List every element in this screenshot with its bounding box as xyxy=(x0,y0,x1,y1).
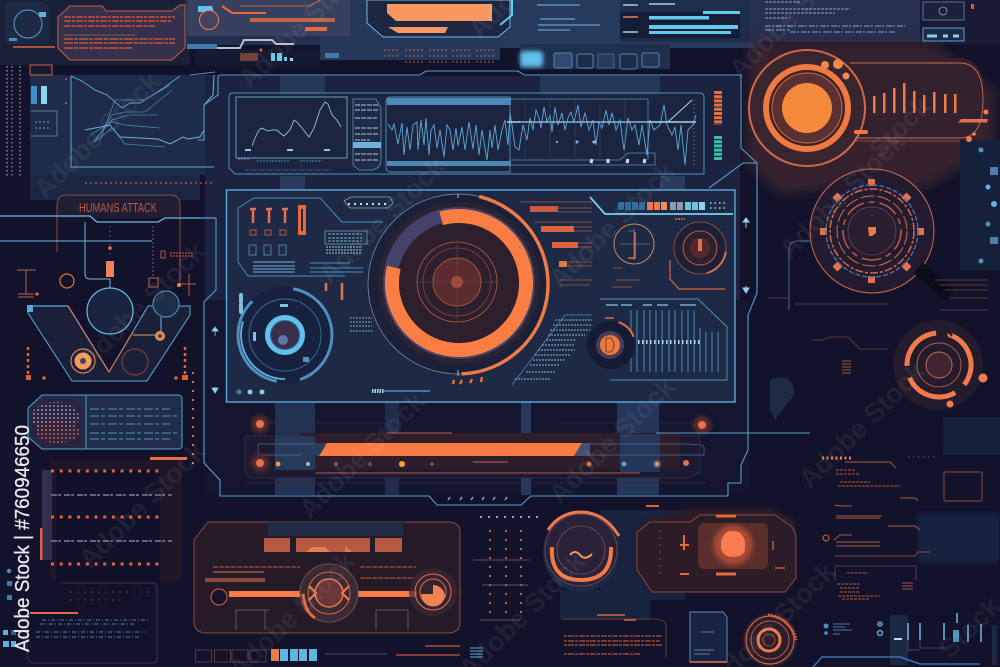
top mini data strip xyxy=(325,50,494,62)
top right text lines xyxy=(765,2,905,32)
gauge: small thin xyxy=(612,224,654,287)
gauge: top-right orange xyxy=(749,50,868,166)
left mini gauges xyxy=(30,65,57,136)
small square xyxy=(149,278,158,287)
watermark: Stock xyxy=(863,90,937,164)
blue status dots xyxy=(236,390,430,394)
panel: orange device xyxy=(637,505,796,592)
palette strip xyxy=(590,197,733,214)
gauge: right segmented xyxy=(893,320,988,410)
top buttons row xyxy=(520,51,659,69)
right blue dots xyxy=(978,148,998,264)
mini text block xyxy=(325,231,367,253)
dial centre xyxy=(300,564,358,622)
text wedge xyxy=(512,315,592,385)
dotted matrix xyxy=(473,517,540,620)
dial right xyxy=(409,568,457,616)
watermark: Adobe Stock xyxy=(543,371,682,509)
cyan circuit lines xyxy=(0,216,215,288)
top right instrument xyxy=(923,2,974,41)
title frame: HUMANS ATTACK xyxy=(79,200,157,215)
panel: lower control bar xyxy=(245,415,810,500)
right-side dots near card xyxy=(192,372,194,470)
right arrows xyxy=(743,218,749,293)
text lines xyxy=(253,262,295,272)
left data card with halftone xyxy=(28,395,182,449)
line chart left xyxy=(66,72,215,183)
top orange block xyxy=(367,0,510,37)
orange T gauges xyxy=(249,205,306,255)
orange indicator xyxy=(106,261,114,277)
top-left text panel xyxy=(58,5,185,60)
ring orange left xyxy=(60,274,74,288)
gauge: bottom right rings xyxy=(743,613,797,667)
small text near gauge xyxy=(350,318,374,331)
document icon xyxy=(690,612,727,662)
watermark: Adobe Stock xyxy=(543,156,682,294)
lower left blue squares xyxy=(3,569,16,647)
gauge: small dial red xyxy=(670,218,730,289)
gauge: gear radar xyxy=(789,169,934,310)
panel: V shield diagram xyxy=(17,226,196,382)
watermark: Adobe Stock xyxy=(313,151,452,289)
orange progress bar xyxy=(316,443,582,456)
blue lens xyxy=(153,291,179,317)
bottom-right mini controls xyxy=(813,613,997,667)
dial left xyxy=(211,589,227,605)
right-lower log panel xyxy=(822,457,982,599)
side meters xyxy=(714,91,722,161)
circle node large xyxy=(87,288,133,334)
sub-panel: controls xyxy=(238,197,393,276)
sub-panel: bar gauge xyxy=(580,299,727,380)
status dots xyxy=(276,460,689,468)
watermark: Adobe Stock xyxy=(773,126,912,264)
watermark: Adobe Stock xyxy=(73,436,212,574)
orange beacons xyxy=(251,415,711,472)
top-right pill backdrop xyxy=(840,58,985,138)
panel: top chart panel xyxy=(229,93,704,174)
orange bars small xyxy=(326,283,342,300)
panel: main dashboard xyxy=(226,175,749,402)
title frame xyxy=(57,195,180,284)
bottom text card xyxy=(562,615,666,658)
panel: bottom-left dashboard xyxy=(194,522,460,633)
outer frame xyxy=(198,71,757,505)
hatch cluster xyxy=(768,268,988,310)
left arrows xyxy=(212,327,218,393)
ribbon stack xyxy=(842,361,851,373)
small line chart xyxy=(236,97,347,170)
watermark: Adobe Stock xyxy=(28,66,167,204)
lower left terminal box xyxy=(27,583,157,663)
top panel with circle xyxy=(187,0,350,66)
waveform panel xyxy=(386,97,696,172)
watermark: Adobe Stock xyxy=(793,356,932,494)
connector node xyxy=(133,317,165,341)
top centre lists xyxy=(500,0,740,38)
right connector xyxy=(812,337,888,349)
bottom small tiles xyxy=(196,646,483,662)
oval dots left of dial xyxy=(239,295,243,312)
dark ring xyxy=(122,349,148,375)
watermark: Adobe Stock xyxy=(73,236,212,374)
gauge: main orange xyxy=(349,175,567,393)
left orange dotted rows xyxy=(40,457,187,564)
watermark: Adobe Stock xyxy=(293,386,432,524)
side credit: Adobe Stock | #760946650 xyxy=(12,425,34,652)
top-left radar icon xyxy=(5,2,55,47)
side list xyxy=(353,99,381,170)
pill tag xyxy=(344,197,393,208)
orange target xyxy=(71,349,95,373)
pill bar chart xyxy=(850,63,988,142)
left dotted column xyxy=(7,66,20,178)
right orange text bars xyxy=(520,202,592,285)
gauge: bottom centre xyxy=(543,512,619,592)
gauge: blue dial xyxy=(231,281,339,389)
